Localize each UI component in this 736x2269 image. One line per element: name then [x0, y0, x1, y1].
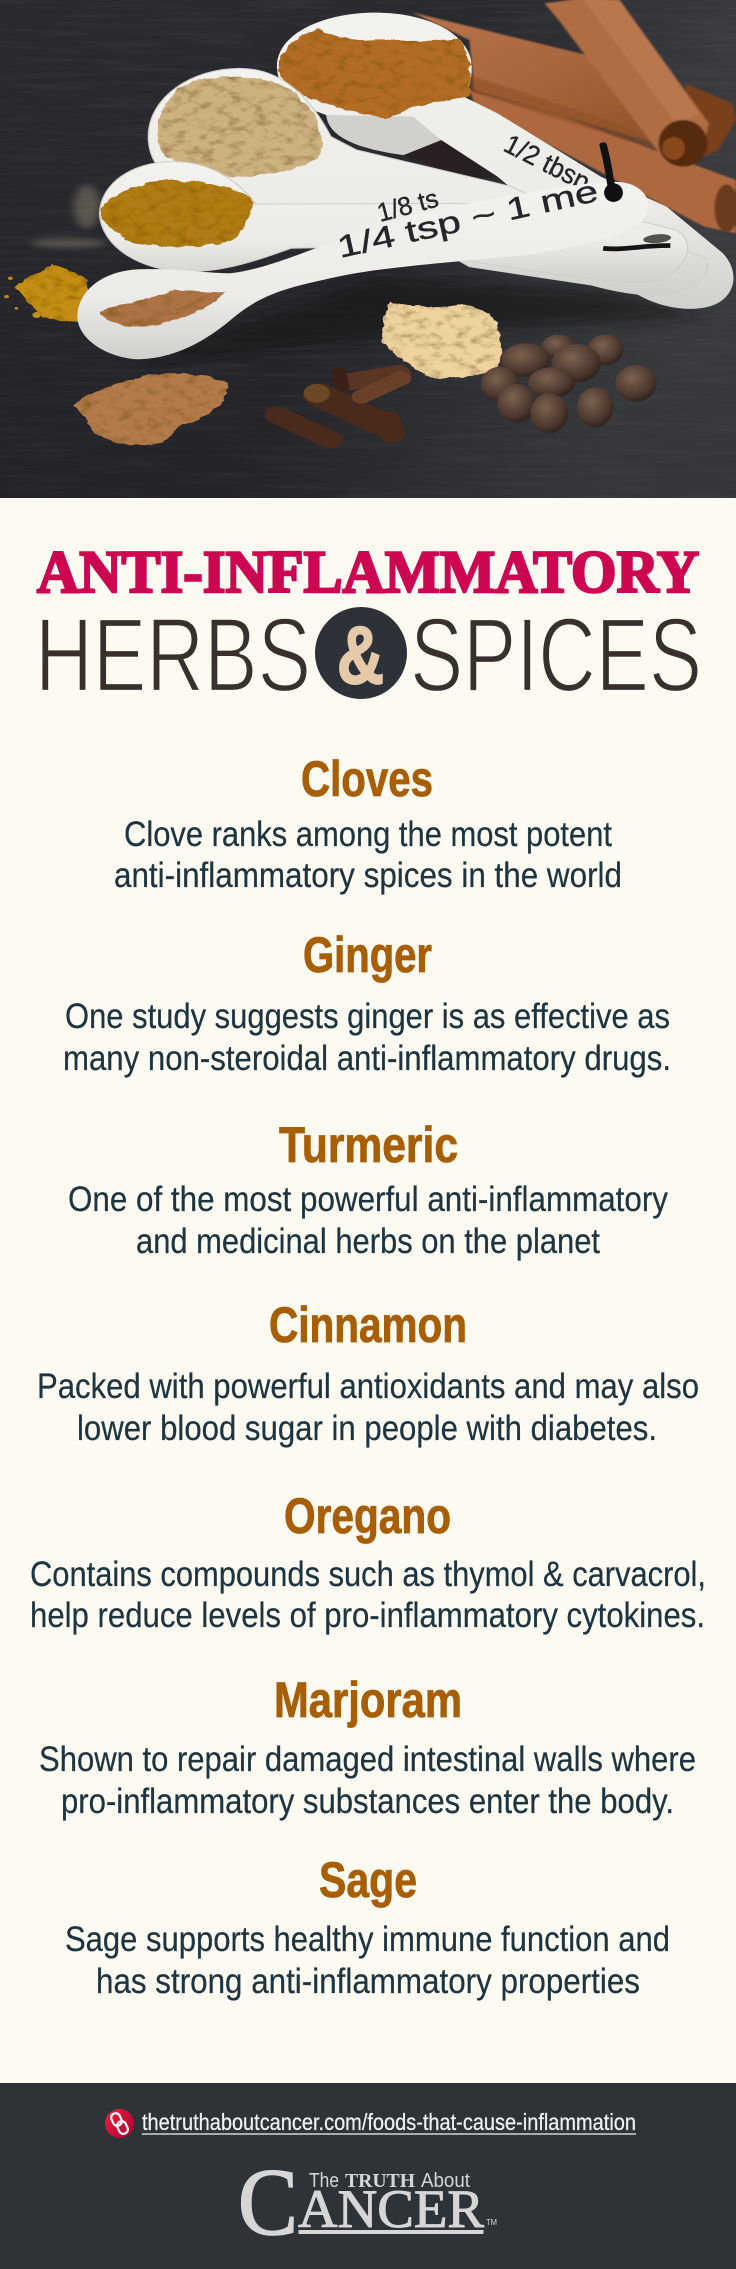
section: ginger: many non-steroidal anti-inflammatory drugs. [63, 1039, 671, 1078]
spoon label: 1/8: 1/8 ts [374, 183, 441, 228]
section: oregano: Oregano [284, 1488, 451, 1544]
ampersand badge: & [337, 610, 384, 701]
title: herbs & spices [35, 597, 702, 714]
pale powder dust [31, 185, 106, 248]
ground nutmeg pile [73, 373, 228, 445]
spoon 1 shaded belly [326, 115, 441, 155]
section: sage [65, 1852, 670, 2001]
section: marjoram [39, 1672, 696, 1821]
section: cloves: Clove ranks among the most potent [124, 815, 612, 854]
section: marjoram: pro-inflammatory substances enter the body. [61, 1782, 674, 1821]
whole cloves [277, 372, 401, 440]
logo: the truth about cancer [238, 2149, 497, 2255]
section: ginger [63, 927, 671, 1078]
dark gap under spoons [404, 140, 498, 180]
logo: the truth about cancer: ANCER [298, 2179, 484, 2239]
panel: title and herb list [30, 539, 706, 2001]
slate background [0, 0, 736, 498]
logo: the truth about cancer: TRUTH [345, 2170, 415, 2192]
logo: the truth about cancer: About [421, 2170, 470, 2192]
nutmeg powder in spoon [100, 290, 224, 326]
section: cloves [114, 751, 622, 895]
section: turmeric [68, 1117, 668, 1261]
spoon 1: back handle and bowl [277, 13, 733, 309]
title: anti-inflammatory: ANTI-INFLAMMATORY [37, 539, 699, 605]
section: cinnamon: lower blood sugar in people with diabetes. [77, 1409, 657, 1448]
word: herbs: HERBS [35, 597, 311, 714]
source link: thetruthaboutcancer.com/foods-that-cause-inflammation [142, 2109, 636, 2135]
section: cloves: Cloves [301, 751, 433, 807]
crystallized ginger [383, 302, 500, 378]
spoon label: 1/4 tsp ~ 1 me: 1/4 tsp ~ 1 me [334, 173, 601, 265]
spoon label: 1/2 tbsp: 1/2 tbsp [499, 129, 595, 197]
spice scene back layer [4, 0, 736, 363]
section: turmeric: Turmeric [279, 1117, 458, 1173]
section: cinnamon [37, 1297, 699, 1448]
section: ginger: One study suggests ginger is as effective as [65, 997, 670, 1036]
logo: the truth about cancer: TM [486, 2218, 497, 2227]
allspice berries [481, 335, 657, 433]
section: cloves: anti-inflammatory spices in the world [114, 856, 622, 895]
spoon 2: ginger [148, 68, 708, 295]
section: sage: Sage [319, 1852, 417, 1908]
hero photo: measuring spoons and spices [0, 0, 736, 498]
icon: chain link [105, 2109, 134, 2138]
ampersand badge [315, 607, 407, 701]
spoon 4: quarter teaspoon [77, 182, 648, 359]
black cord and knot [603, 145, 623, 202]
cord through spoon tips [603, 233, 672, 249]
turmeric spill [4, 265, 89, 322]
turmeric powder [100, 180, 253, 247]
cinnamon powder [278, 28, 470, 118]
section: sage: has strong anti-inflammatory properties [96, 1962, 640, 2001]
cinnamon sticks [413, 0, 736, 233]
spoon shadows on the slate [141, 277, 704, 363]
section: turmeric: and medicinal herbs on the planet [136, 1222, 600, 1261]
section: cinnamon: Cinnamon [269, 1297, 467, 1353]
footer [0, 2083, 736, 2269]
section: turmeric: One of the most powerful anti-inflammatory [68, 1180, 668, 1219]
ginger powder [157, 78, 322, 177]
logo: the truth about cancer: C [238, 2149, 298, 2255]
section: ginger: Ginger [303, 927, 432, 983]
section: sage: Sage supports healthy immune function and [65, 1920, 670, 1959]
spoon 3: turmeric [100, 162, 688, 283]
logo: the truth about cancer: The [309, 2170, 339, 2192]
section: marjoram: Marjoram [274, 1672, 462, 1728]
section: oregano [30, 1488, 706, 1635]
